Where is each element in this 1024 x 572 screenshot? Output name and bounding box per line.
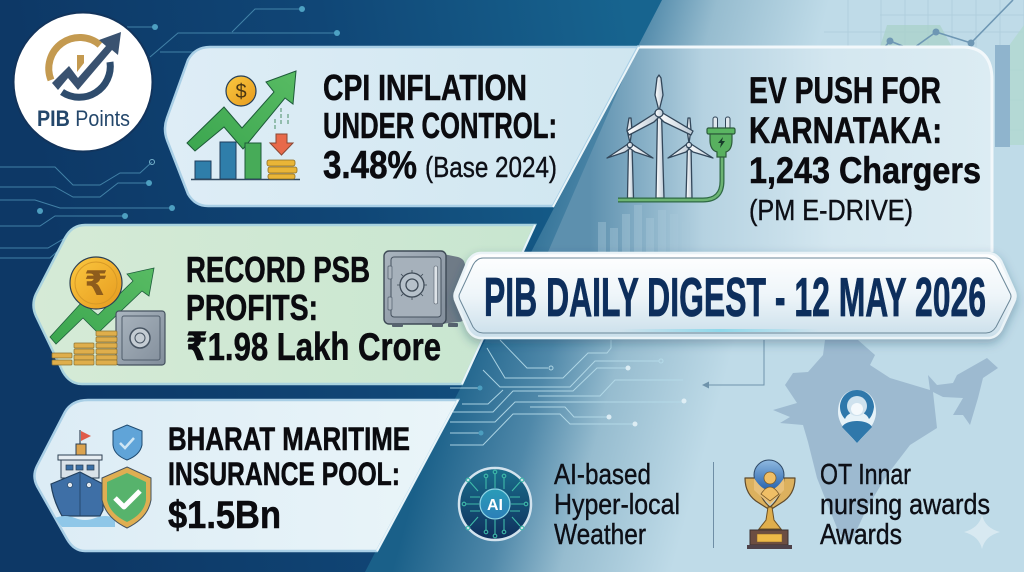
heading: CPI inflation: CPI INFLATION <box>323 67 527 108</box>
stat: 3.48 percent: 3.48% <box>323 144 417 187</box>
text: OT Innar nursing awards: nursing awards <box>820 489 990 521</box>
icon: inflation chart: $ <box>235 81 247 103</box>
decorative circuit lines lower middle <box>450 340 686 445</box>
icon: rupee coin, arrow, safe and coin stacks <box>50 257 165 365</box>
icon: logo arc and arrow <box>49 32 121 97</box>
heading: EV push: EV PUSH FOR <box>749 70 941 111</box>
map of India with pin <box>773 340 998 545</box>
text: OT Innar nursing awards: Awards <box>820 519 902 551</box>
faint bars in EV panel <box>598 205 690 252</box>
logo badge: PIB Points <box>14 12 152 152</box>
icon: nursing award trophy <box>745 460 795 549</box>
icon: sparkle <box>964 515 1000 549</box>
logo wordmark: PIB Points <box>37 106 130 131</box>
connector arrow to map <box>702 340 764 388</box>
text: AI-based hyper-local weather: Hyper-local <box>554 489 680 521</box>
text: OT Innar nursing awards: OT Innar <box>820 459 911 491</box>
text: AI-based hyper-local weather: Weather <box>554 519 646 551</box>
icon: AI chip circle <box>459 468 531 540</box>
icon: wind turbines and plug <box>607 75 735 200</box>
icon: nurse location pin <box>838 390 876 443</box>
icon: ship and shields <box>51 425 151 528</box>
icon: large safe <box>384 251 465 327</box>
text: AI-based hyper-local weather: AI-based <box>554 459 651 491</box>
heading: insurance pool: INSURANCE POOL: <box>168 456 400 492</box>
heading: record PSB: RECORD PSB <box>186 249 370 290</box>
icon: rupee coin, arrow, safe and coin stacks: ₹ <box>84 265 108 303</box>
panel: record PSB profits <box>34 225 535 384</box>
panel: EV push for Karnataka <box>548 47 992 252</box>
stat: chargers: 1,243 Chargers <box>749 150 981 191</box>
decorative circuit lines left <box>0 6 340 258</box>
heading: Karnataka: KARNATAKA: <box>749 110 942 151</box>
panel: CPI inflation <box>165 47 639 207</box>
text: AI-based hyper-local weather <box>554 459 680 551</box>
icon: AI chip circle: AI <box>487 497 503 514</box>
heading: Bharat maritime: BHARAT MARITIME <box>168 421 410 457</box>
title banner <box>454 253 1016 338</box>
subtext: PM E-Drive: (PM E-DRIVE) <box>749 195 913 227</box>
text: OT Innar nursing awards <box>820 459 990 551</box>
stat: 1.98 lakh crore: ₹1.98 Lakh Crore <box>186 326 441 369</box>
subtext: base 2024: (Base 2024) <box>425 152 557 184</box>
decorative chart top right <box>824 0 1024 147</box>
heading: profits: PROFITS: <box>186 287 318 328</box>
heading: under control: UNDER CONTROL: <box>323 105 557 146</box>
panel: Bharat maritime insurance pool <box>34 400 458 551</box>
icon: inflation chart <box>187 71 300 180</box>
stat: 1.5 billion dollars: $1.5Bn <box>168 494 281 537</box>
